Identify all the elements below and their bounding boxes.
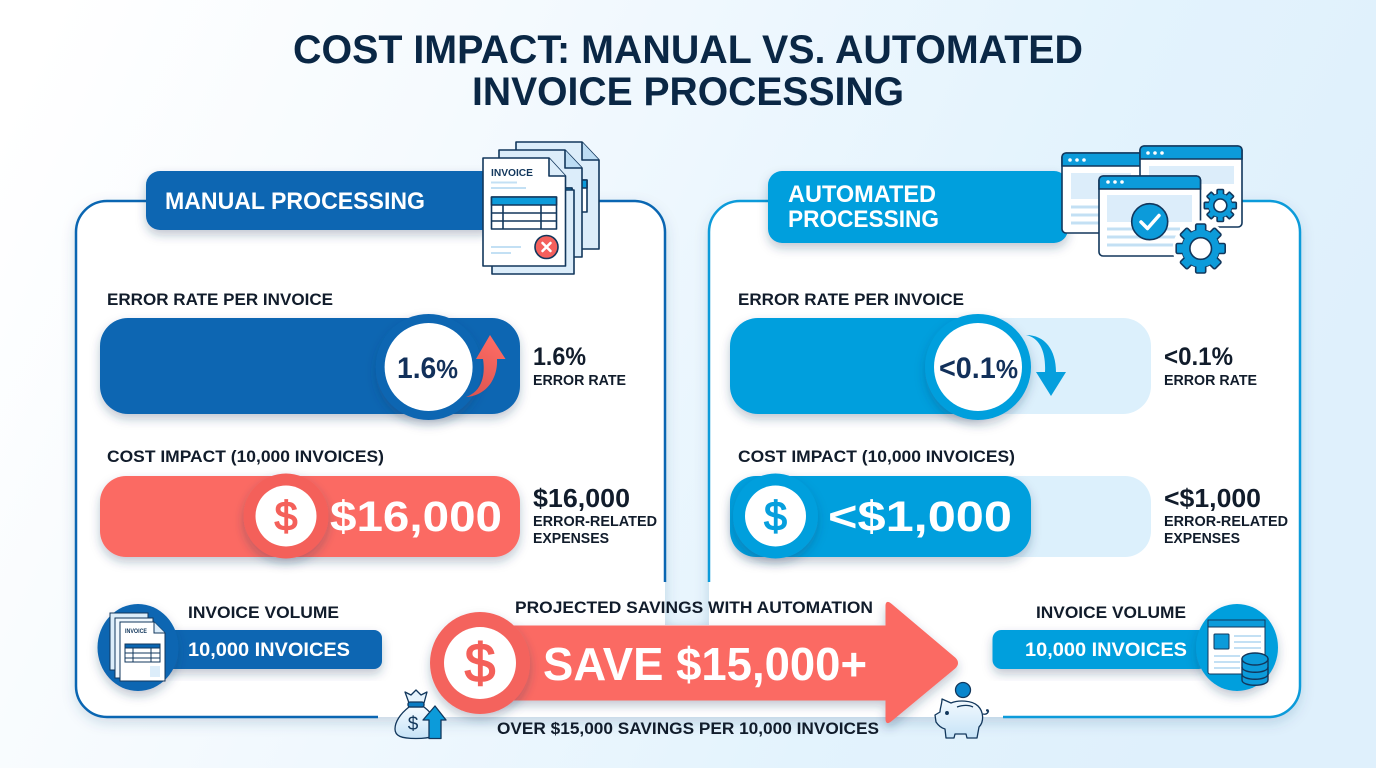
icon: piggy bank with coin bbox=[935, 682, 989, 738]
stat: automated cost: EXPENSES bbox=[1164, 530, 1240, 547]
icon: dollar badge bbox=[244, 474, 328, 558]
icon: invoice pages: INVOICE bbox=[125, 629, 147, 635]
icon: window with database bbox=[1208, 620, 1268, 685]
icon: dollar badge: $ bbox=[465, 632, 495, 694]
stat: manual error rate: ERROR RATE bbox=[533, 372, 626, 389]
icon: dollar badge bbox=[733, 474, 818, 558]
label: automated error rate: ERROR RATE PER INVOICE bbox=[738, 290, 964, 309]
badge: under 0.1 percent: <0.1% bbox=[939, 352, 1018, 385]
icon: invoice pages bbox=[110, 613, 165, 681]
stat: automated error rate bbox=[1164, 343, 1257, 389]
icon: money bag with up arrow: $ bbox=[408, 714, 419, 735]
stat: manual cost: $16,000 bbox=[533, 483, 630, 513]
title: COST IMPACT: MANUAL VS. AUTOMATED bbox=[293, 28, 1083, 72]
title: INVOICE PROCESSING bbox=[472, 70, 904, 114]
icon: money bag with up arrow bbox=[395, 690, 446, 738]
invoice volume: manual: 10,000 INVOICES bbox=[188, 640, 350, 661]
badge: 1.6 percent bbox=[376, 314, 482, 420]
invoice volume: automated bbox=[992, 603, 1278, 691]
icon: dollar badge: $ bbox=[764, 493, 787, 539]
label: manual error rate: ERROR RATE PER INVOICE bbox=[107, 290, 333, 309]
arrow: error rate down bbox=[1026, 335, 1066, 396]
callout: projected savings label: PROJECTED SAVINGS WITH AUTOMATION bbox=[515, 598, 873, 617]
label: automated cost impact: COST IMPACT (10,000 INVOICES) bbox=[738, 447, 1015, 466]
stat: automated error rate: ERROR RATE bbox=[1164, 372, 1257, 389]
stat: manual cost: EXPENSES bbox=[533, 530, 609, 547]
invoice volume: automated: 10,000 INVOICES bbox=[1025, 640, 1187, 661]
panel: automated processing bbox=[709, 201, 1300, 717]
badge: under 0.1 percent bbox=[925, 314, 1031, 420]
callout: savings footnote: OVER $15,000 SAVINGS PER 10,000 INVOICES bbox=[497, 719, 879, 738]
heading: automated processing bbox=[768, 171, 1068, 243]
title bbox=[293, 28, 1083, 114]
stat: manual cost: ERROR-RELATED bbox=[533, 513, 657, 530]
bar: manual cost impact bbox=[100, 474, 520, 558]
heading: automated processing: PROCESSING bbox=[788, 206, 939, 233]
label: manual cost impact: COST IMPACT (10,000 INVOICES) bbox=[107, 447, 384, 466]
heading: manual processing: MANUAL PROCESSING bbox=[165, 188, 425, 215]
icon: dollar badge: $ bbox=[275, 493, 298, 539]
invoice volume: manual: INVOICE VOLUME bbox=[188, 603, 339, 622]
arrow: save 15,000+: SAVE $15,000+ bbox=[543, 638, 867, 690]
panel: manual processing bbox=[76, 201, 665, 717]
stat: manual cost bbox=[533, 483, 657, 547]
stat: automated cost bbox=[1164, 483, 1288, 547]
invoice volume: manual bbox=[98, 603, 382, 691]
bar: manual cost impact: $16,000 bbox=[330, 493, 502, 541]
invoice volume: automated: INVOICE VOLUME bbox=[1036, 603, 1186, 622]
bar: manual error rate bbox=[100, 314, 520, 420]
heading: manual processing bbox=[146, 171, 496, 230]
bar: automated cost impact: <$1,000 bbox=[828, 493, 1012, 541]
heading: automated processing: AUTOMATED bbox=[788, 181, 936, 208]
icon: invoice stack: INVOICE bbox=[491, 168, 533, 179]
icon: invoice stack bbox=[483, 142, 599, 274]
stat: automated cost: ERROR-RELATED bbox=[1164, 513, 1288, 530]
icon: software windows with gears bbox=[1062, 146, 1242, 276]
stat: manual error rate bbox=[533, 343, 626, 389]
icon: dollar badge bbox=[430, 612, 530, 714]
bar: automated cost impact bbox=[730, 474, 1151, 558]
bar: automated error rate bbox=[730, 314, 1151, 420]
arrow: save 15,000+ bbox=[430, 602, 958, 723]
stat: manual error rate: 1.6% bbox=[533, 343, 586, 371]
stat: automated error rate: <0.1% bbox=[1164, 343, 1233, 371]
badge: 1.6 percent: 1.6% bbox=[397, 352, 458, 385]
arrow: error rate up bbox=[466, 335, 506, 397]
stat: automated cost: <$1,000 bbox=[1164, 483, 1261, 513]
